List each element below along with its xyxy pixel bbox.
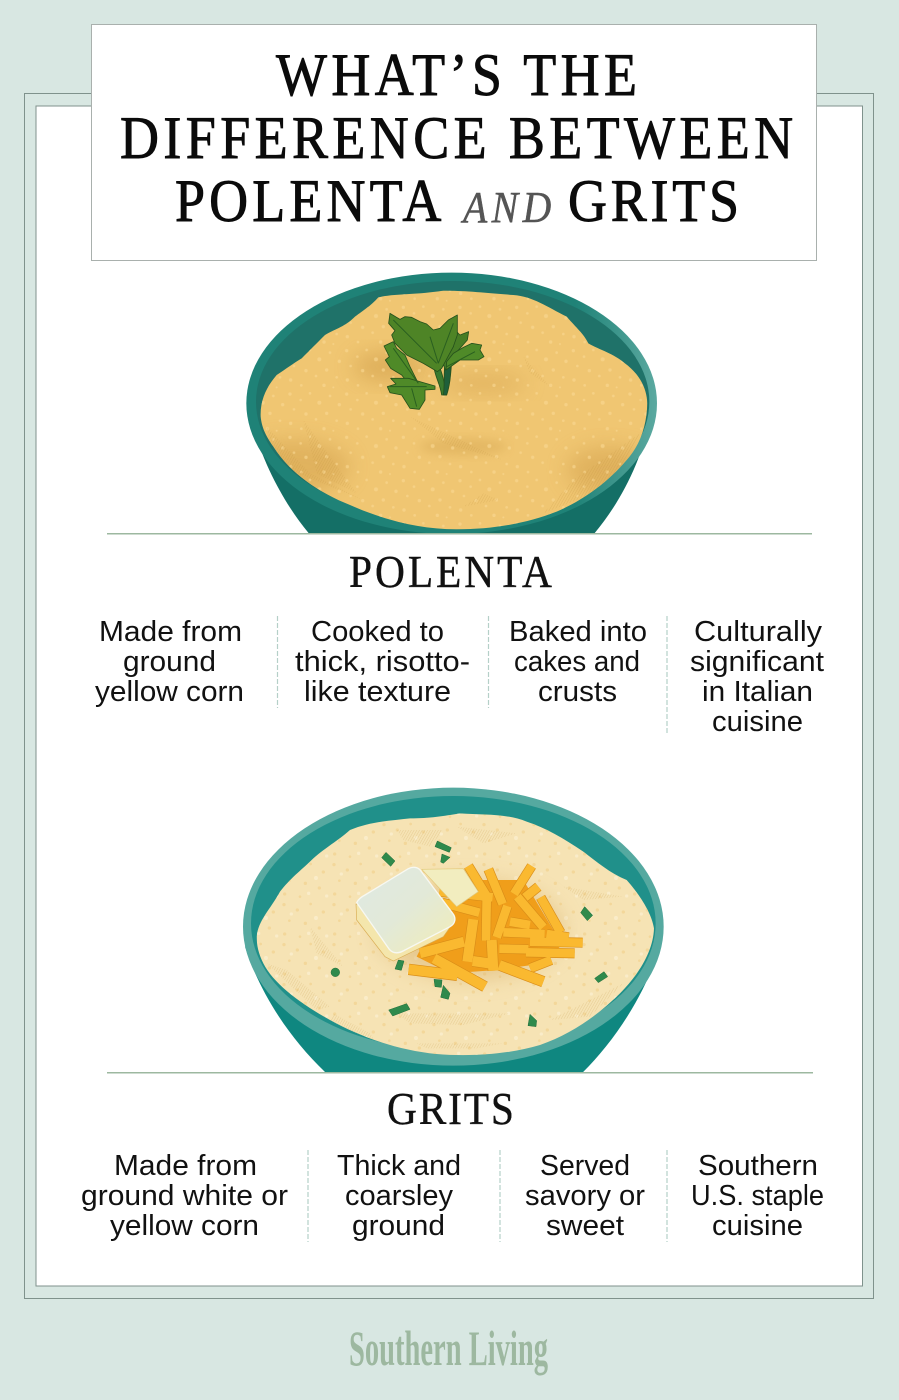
grits fact 3: savory or (525, 1180, 645, 1212)
polenta fact 3: crusts (538, 676, 617, 708)
polenta fact 1: ground (123, 646, 216, 678)
grits fact 4: U.S. staple (691, 1180, 824, 1212)
inner white panel (36, 106, 862, 1286)
polenta fact 1: yellow corn (95, 676, 244, 708)
butter pat (356, 867, 478, 961)
polenta fact 2 (295, 616, 470, 708)
heading: polenta: POLENTA (349, 547, 552, 598)
grits fact 2 (337, 1150, 461, 1242)
grits fact 3: sweet (546, 1210, 624, 1242)
parsley garnish (384, 313, 484, 409)
bowl inner (256, 281, 650, 495)
title panel (92, 24, 816, 260)
title line 3: GRITS (568, 168, 739, 235)
grits fact 1: yellow corn (110, 1210, 259, 1242)
chives (331, 841, 608, 1027)
bowl rim (243, 788, 664, 1066)
polenta fact 2: thick, risotto- (295, 646, 470, 678)
shredded cheese (409, 866, 583, 987)
polenta fact 3 (509, 616, 647, 708)
grits fact 3: Served (540, 1150, 630, 1182)
polenta fact 3: cakes and (514, 646, 640, 678)
polenta fact 3: Baked into (509, 616, 647, 648)
grits fact 2: ground (352, 1210, 445, 1242)
title line 3: AND (460, 184, 551, 233)
grits fact 2: Thick and (337, 1150, 461, 1182)
title line 2: DIFFERENCE BETWEEN (120, 105, 793, 172)
title line 1: WHAT’S THE (276, 42, 637, 109)
grits fact 4: cuisine (712, 1210, 803, 1242)
heading: grits: GRITS (387, 1084, 514, 1135)
polenta fact 4: Culturally (694, 616, 823, 648)
polenta fact 4: significant (690, 646, 824, 678)
grits fact 3 (525, 1150, 645, 1242)
grits fact 4 (691, 1150, 824, 1242)
bowl inner (251, 796, 656, 1051)
polenta fact 1 (95, 616, 244, 708)
title line 3: POLENTA (175, 168, 441, 235)
divider grits (107, 1072, 813, 1074)
bowl rim (246, 273, 657, 534)
grits fact 2: coarsley (345, 1180, 453, 1212)
polenta mound (260, 290, 648, 530)
grits fact 1 (81, 1150, 288, 1242)
polenta fact 2: Cooked to (311, 616, 444, 648)
grits fact 1: ground white or (81, 1180, 288, 1212)
illustration: polenta bowl (237, 273, 657, 540)
logo: Southern Living: Southern Living (349, 1320, 548, 1376)
grits fact 4: Southern (698, 1150, 818, 1182)
bowl body (262, 454, 640, 533)
bowl body (245, 947, 660, 1077)
title line 3 (175, 168, 739, 235)
grits surface (256, 813, 654, 1056)
polenta fact 4: cuisine (712, 706, 803, 738)
polenta fact 2: like texture (304, 676, 451, 708)
polenta fact 4: in Italian (702, 676, 813, 708)
grits fact 1: Made from (114, 1150, 257, 1182)
illustration: grits bowl (243, 788, 664, 1077)
polenta fact 1: Made from (99, 616, 242, 648)
divider polenta (107, 533, 812, 534)
polenta fact 4 (690, 616, 824, 738)
